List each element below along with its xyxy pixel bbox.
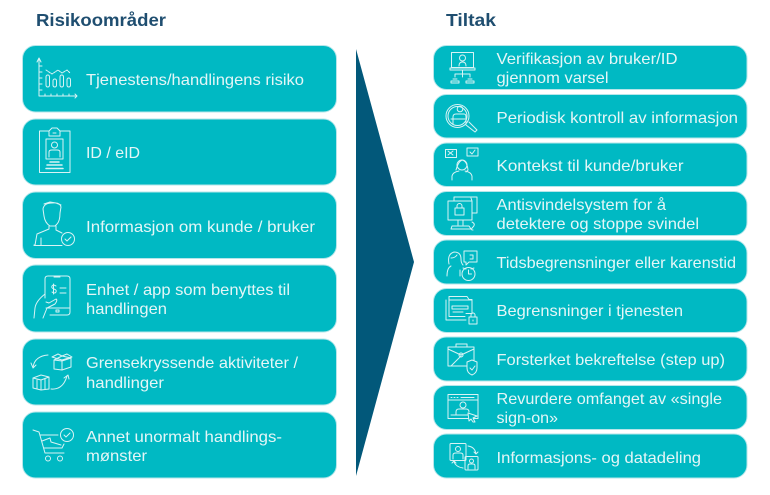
measure card: Antisvindelsystem [434,192,747,236]
risk card: ID / eID [22,119,336,185]
label: Begrensninger i tjenesten [496,303,683,320]
panel: risk areas [22,46,336,478]
heading: Tiltak: Tiltak [446,10,496,30]
label: Forsterket bekreftelse (step up) [496,352,725,369]
icon: shopping cart [33,428,74,461]
icon: magnifier with person [446,104,477,132]
icon: user with check [34,202,74,246]
measure card: Kontekst [434,143,747,186]
icon: data sharing [450,444,478,470]
icon: woman with clock [447,251,477,280]
label: Grensekryssende aktiviteter / [86,355,299,372]
risk card: Grensekryssende [22,339,336,405]
measure card: Revurdere: sign-on» [496,410,558,427]
measure card: Antisvindelsystem: detektere og stoppe svindel [496,216,699,233]
label: Periodisk kontroll av informasjon [496,110,738,127]
risk card: Enhet / app [22,265,336,332]
icon: laptop network [450,52,475,83]
arrow: large triangle [356,49,414,476]
label: Revurdere omfanget av «single [496,391,722,408]
measure card: Tidsbegrensninger [434,240,747,284]
label: Tjenestens/handlingens risiko [86,72,304,89]
icon: person with boxes [446,148,478,180]
icon: phone in hand [34,276,70,318]
label: Tidsbegrensninger eller karenstid [496,255,736,272]
heading: Risikoområder: Risikoområder [36,10,166,30]
label: Informasjons- og datadeling [496,450,701,467]
icon: browser with cursor [448,394,478,422]
risk card: Grensekryssende: handlinger [86,375,165,392]
icon: monitors with lock [448,197,477,230]
risk card: Tjenestens/handlingens risiko [22,46,336,112]
risk card: Annet unormalt [22,412,336,478]
icon: boxes with arrows [31,354,72,390]
icon: windows with lock [446,296,477,324]
risk card: Enhet / app: handlingen [86,301,167,318]
measure card: Begrensninger [434,288,747,332]
label: Kontekst til kunde/bruker [496,158,684,175]
measure card: Verifikasjon [434,46,747,90]
label: Informasjon om kunde / bruker [86,219,316,236]
label: Annet unormalt handlings- [86,429,282,446]
measure card: Forsterket bekreftelse [434,337,747,381]
risk card: Annet unormalt: mønster [86,448,148,465]
measure card: Periodisk kontroll [434,94,747,138]
icon: briefcase with shield [448,344,477,375]
measure card: Revurdere [434,386,747,430]
label: Enhet / app som benyttes til [86,282,290,299]
measure card: Informasjons- og datadeling [434,434,747,478]
icon: chart [37,58,77,98]
risk card: Informasjon om kunde / bruker [22,192,336,258]
label: ID / eID [86,145,140,162]
measure card: Verifikasjon: gjennom varsel [496,70,608,87]
label: Antisvindelsystem for å [496,196,666,214]
panel: measures [434,46,747,478]
icon: ID badge [40,128,70,172]
label: Verifikasjon av bruker/ID [496,51,678,68]
